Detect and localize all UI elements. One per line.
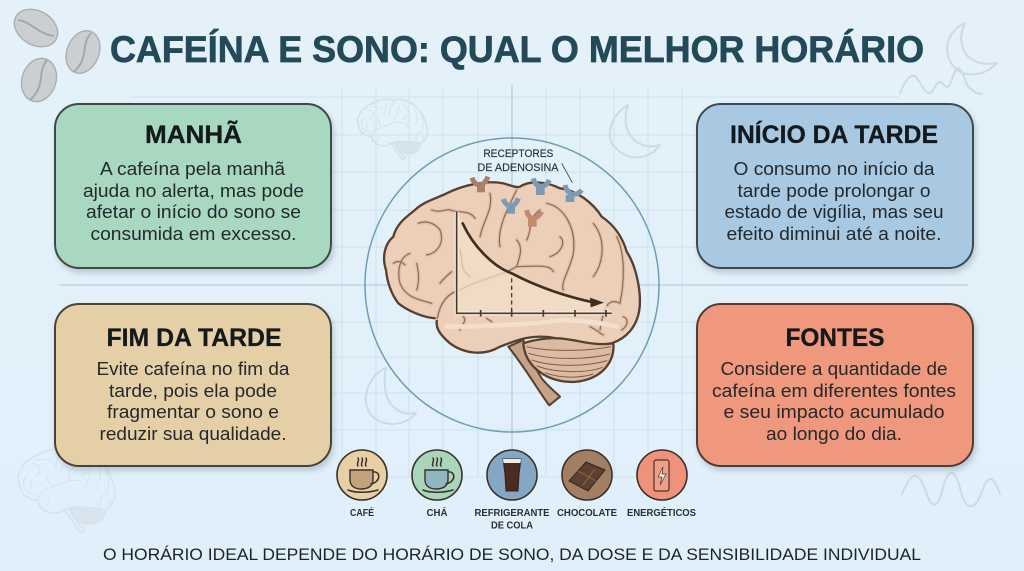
heading: manhã: MANHÃ xyxy=(145,119,242,149)
source: energéticos xyxy=(627,450,696,519)
decay curve arrow xyxy=(463,223,604,307)
text: fim da tarde xyxy=(96,358,290,444)
text: fontes: cafeína em diferentes fontes xyxy=(712,380,956,401)
temporal lobe highlight xyxy=(447,320,617,327)
text: fontes: ao longo do dia. xyxy=(766,423,902,444)
source: energéticos: ENERGÉTICOS xyxy=(627,506,696,519)
cerebrum xyxy=(384,182,640,353)
text: fim da tarde: reduzir sua qualidade. xyxy=(100,423,286,444)
text: manhã: ajuda no alerta, mas pode xyxy=(83,180,304,201)
footer note: O HORÁRIO IDEAL DEPENDE DO HORÁRIO DE SONO, DA DOSE E DA SENSIBILIDADE INDIVIDUAL xyxy=(103,545,921,564)
heading: fontes: FONTES xyxy=(786,324,884,352)
label: receptores de adenosina: RECEPTORES xyxy=(483,148,553,160)
source: refrigerante de cola: DE COLA xyxy=(491,520,533,532)
label: receptores de adenosina: DE ADENOSINA xyxy=(477,162,559,174)
cerebellum xyxy=(523,338,613,382)
source: chocolate: CHOCOLATE xyxy=(557,507,617,519)
source: refrigerante de cola xyxy=(474,450,550,532)
text: fim da tarde: fragmentar o sono e xyxy=(107,401,279,422)
chart area xyxy=(457,212,612,313)
text: início da tarde: tarde pode prolongar o xyxy=(738,180,930,201)
text: manhã: A cafeína pela manhã xyxy=(100,158,286,179)
text: fontes: Considere a quantidade de xyxy=(720,358,948,379)
icon: faint wave right xyxy=(902,473,1000,506)
text: fontes: e seu impacto acumulado xyxy=(724,401,944,422)
text: início da tarde: efeito diminui até a noite. xyxy=(726,223,942,244)
cortex folds xyxy=(393,190,627,335)
circle around brain xyxy=(365,138,659,432)
label: receptores de adenosina xyxy=(477,148,572,183)
text: início da tarde: estado de vigília, mas seu xyxy=(724,201,944,222)
source: café xyxy=(337,450,387,519)
icon: faint brain bottom left xyxy=(18,449,115,533)
panel: fontes xyxy=(697,304,973,466)
icon: faint moon upper centre xyxy=(610,105,660,157)
panel: manhã xyxy=(55,104,331,268)
icon: coffee beans xyxy=(8,2,106,106)
source: refrigerante de cola: REFRIGERANTE xyxy=(474,507,550,519)
source: chá: CHÁ xyxy=(426,506,448,519)
text: fim da tarde: tarde, pois ela pode xyxy=(109,380,277,401)
icon: faint brain top xyxy=(358,99,427,160)
heading: início da tarde: INÍCIO DA TARDE xyxy=(730,120,938,149)
chart axes xyxy=(457,212,612,317)
text: fontes xyxy=(712,358,956,444)
text: fim da tarde: Evite cafeína no fim da xyxy=(96,358,290,379)
text: manhã xyxy=(83,158,304,244)
panel: início da tarde xyxy=(697,104,973,268)
text: manhã: consumida em excesso. xyxy=(90,223,296,244)
source: café: CAFÉ xyxy=(350,506,374,519)
icon: moon and wave top right xyxy=(900,23,997,94)
text: início da tarde: O consumo no início da xyxy=(734,158,935,179)
source: chocolate xyxy=(557,450,617,519)
panel: fim da tarde xyxy=(55,304,331,466)
heading: fim da tarde: FIM DA TARDE xyxy=(106,324,282,352)
title: CAFEÍNA E SONO: QUAL O MELHOR HORÁRIO xyxy=(110,28,924,70)
text: início da tarde xyxy=(724,158,944,244)
illustration: brain with caffeine chart xyxy=(384,148,640,405)
text: manhã: afetar o início do sono se xyxy=(86,201,301,222)
brainstem xyxy=(508,340,560,405)
receptors xyxy=(472,177,582,227)
sources row xyxy=(337,450,696,532)
source: chá xyxy=(412,450,462,519)
icon: faint moon lower left of circle xyxy=(366,368,416,424)
